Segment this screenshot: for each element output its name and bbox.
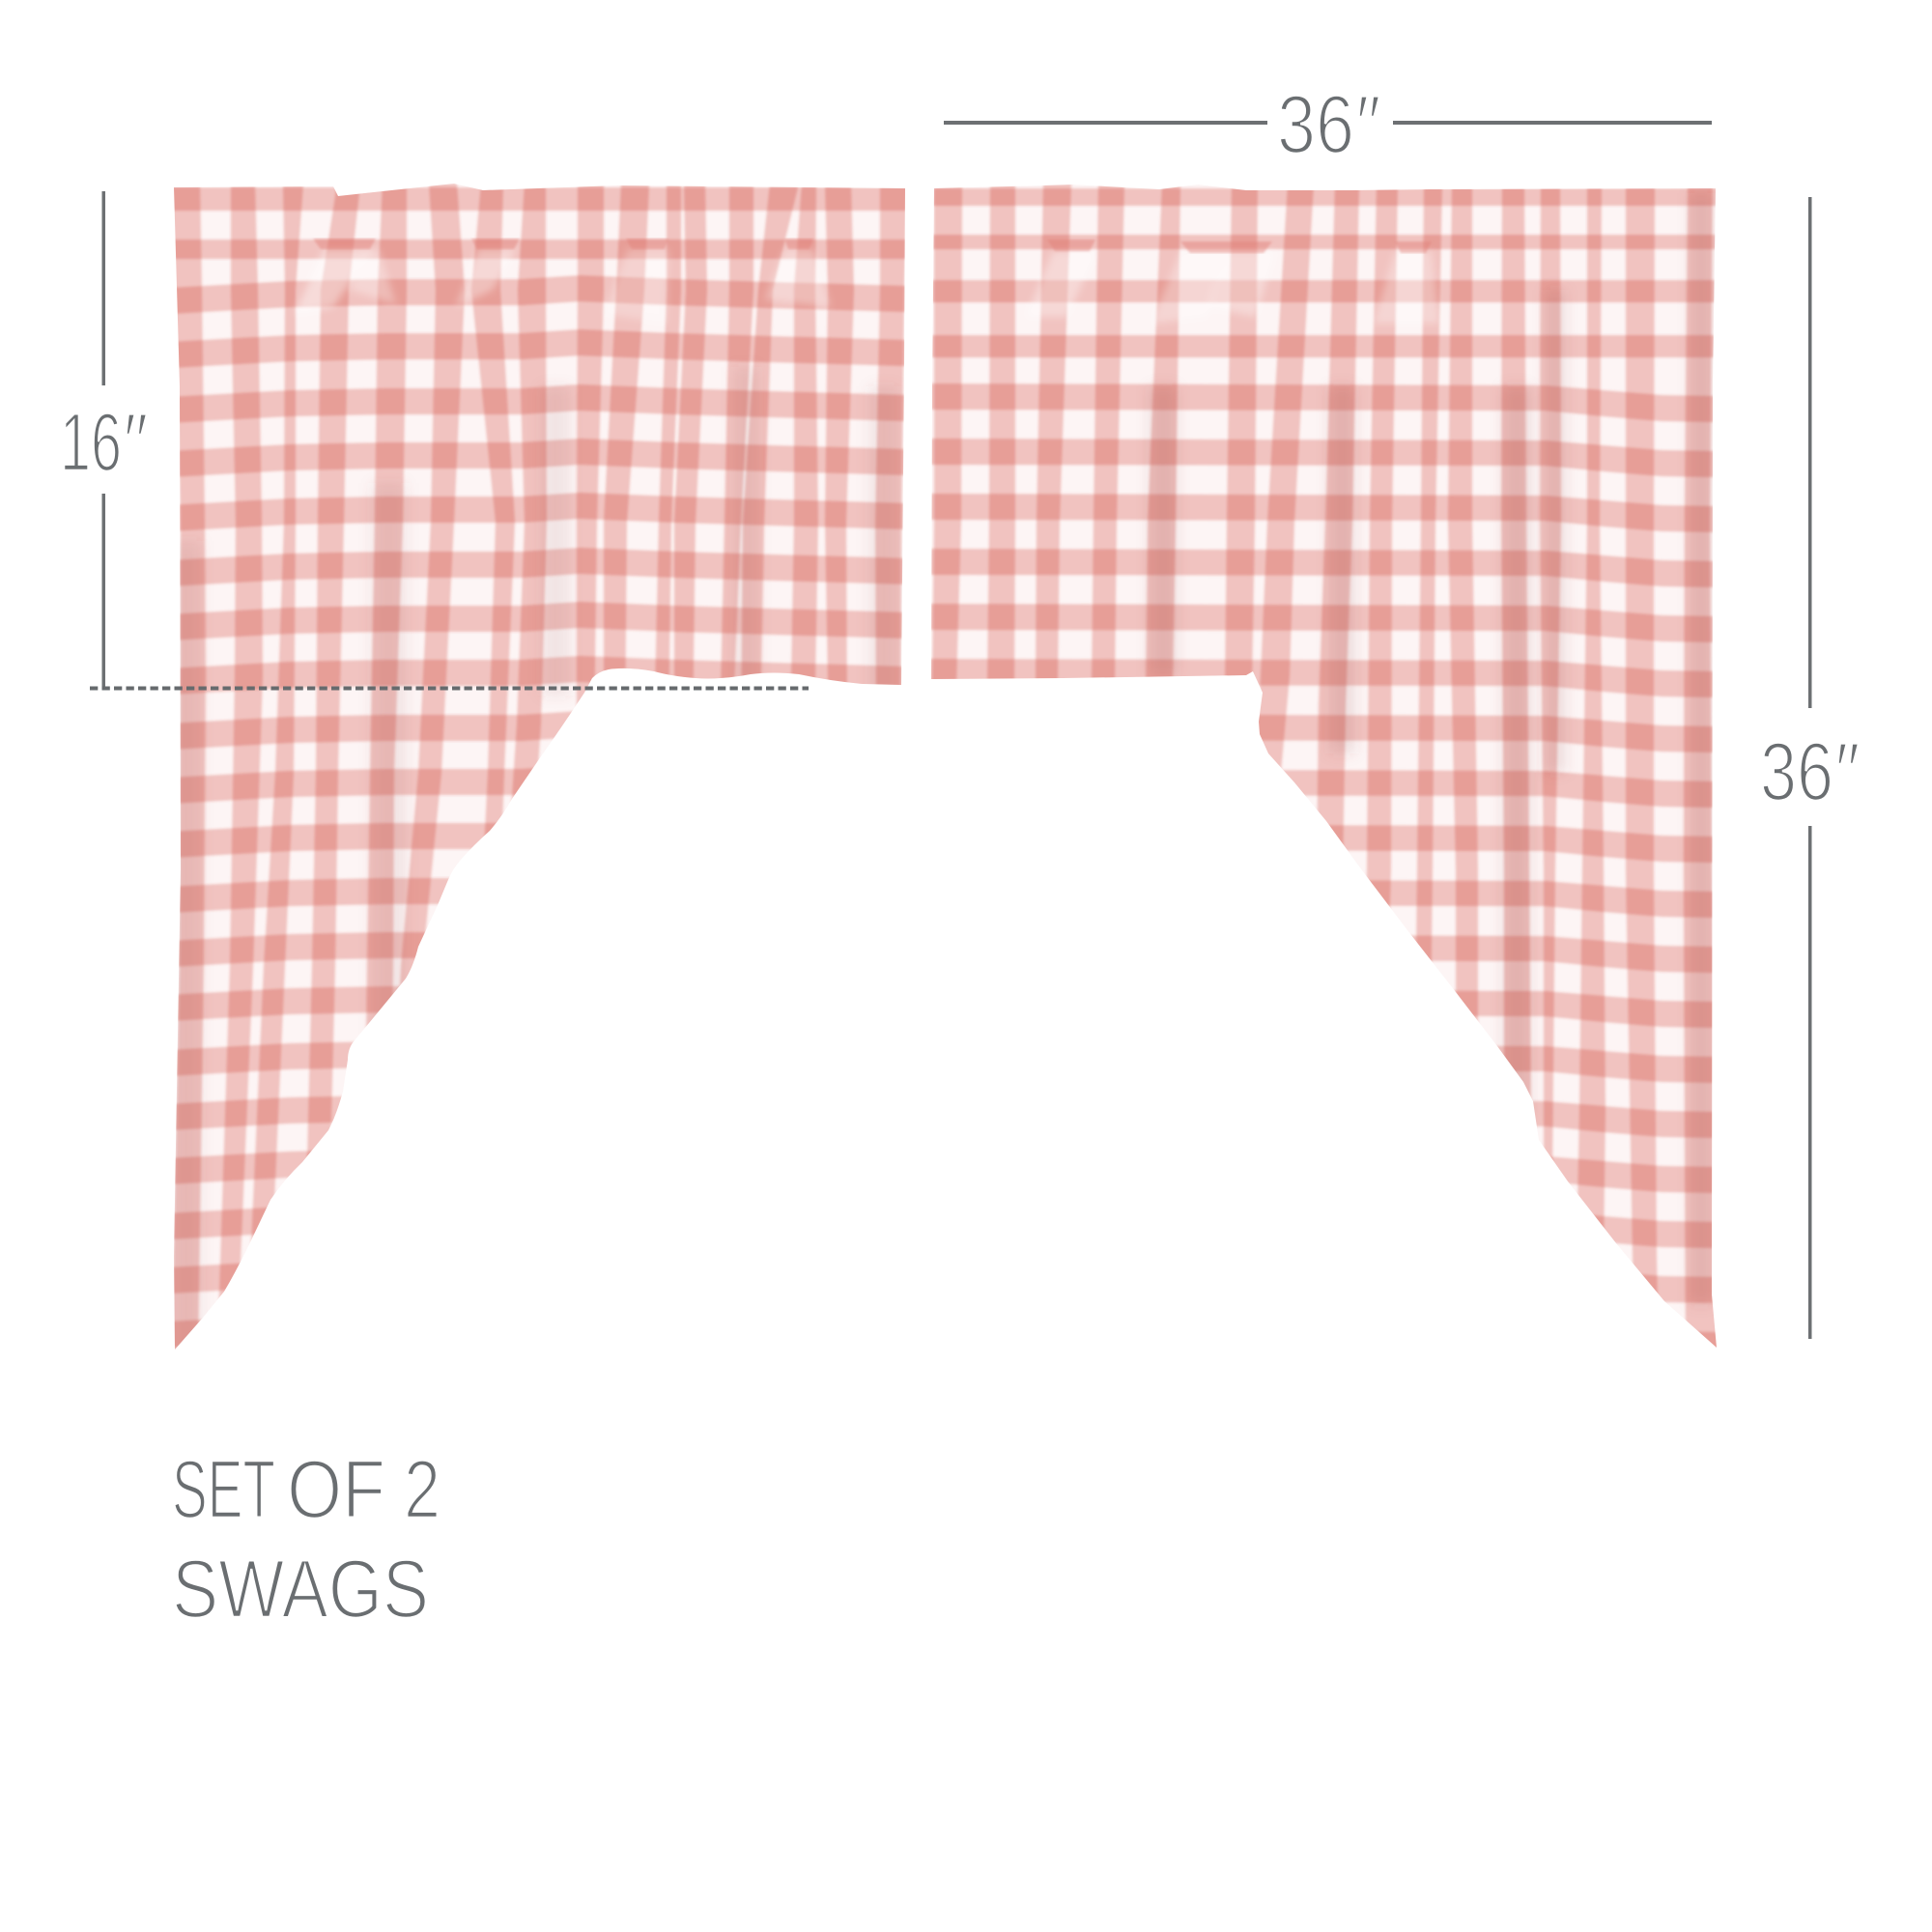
dimension: right length 36 inches: 36 <box>1760 726 1833 818</box>
dimension: top width 36 inches: 36 <box>1277 79 1354 171</box>
caption: set of 2 swags <box>172 1444 440 1635</box>
panel: left swag curtain <box>164 179 918 1357</box>
dimension: top width 36 inches <box>944 79 1712 171</box>
dimension: right length 36 inches <box>1760 197 1860 1339</box>
left gingham weave <box>169 184 913 1352</box>
right rod pocket gathers <box>1047 240 1432 253</box>
dimension: left drop 16 inches: ″ <box>120 397 148 489</box>
panel: right swag curtain <box>923 179 1729 1358</box>
dimension: left drop 16 inches: 16 <box>60 397 122 489</box>
caption: set of 2 swags: SWAGS <box>172 1544 429 1635</box>
right fold shadows <box>1150 193 1712 1304</box>
caption: set of 2 swags: 2 <box>404 1444 440 1536</box>
left rod pocket highlights <box>295 249 831 324</box>
dashed drop guide line <box>90 686 809 690</box>
dimension: top width 36 inches: ″ <box>1352 79 1380 171</box>
left rod pocket gathers <box>313 239 813 249</box>
right rod pocket highlights <box>1026 251 1439 324</box>
left fold shadows <box>172 367 898 1352</box>
caption: set of 2 swags: OF <box>287 1444 385 1536</box>
right gingham weave <box>927 184 1729 1358</box>
dimension: right length 36 inches: ″ <box>1832 726 1860 818</box>
caption: set of 2 swags: SET <box>172 1444 274 1536</box>
dimension: left drop 16 inches <box>60 191 148 688</box>
